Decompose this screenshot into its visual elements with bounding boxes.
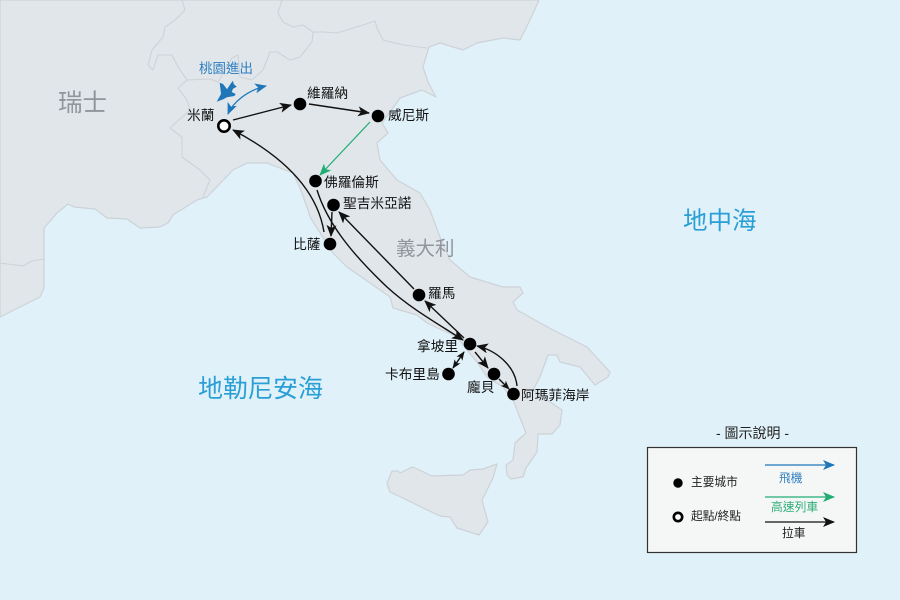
arrow: Verona to Venice: [309, 104, 369, 113]
legend icon: start and end point: [674, 513, 682, 521]
label: Pisa: 比薩: [293, 237, 321, 252]
marker: Milan: [218, 120, 230, 132]
legend icon: major city: [673, 478, 683, 488]
marker: Pompeii: [488, 368, 500, 380]
arrow: Pisa to Milan: [233, 130, 324, 232]
label: Florence: 佛羅倫斯: [324, 175, 379, 190]
legend title: - 圖示說明 -: [716, 425, 789, 441]
marker: Florence: [309, 175, 322, 187]
city markers: [218, 98, 520, 400]
arrow: flights in and out of Milan: [228, 86, 266, 114]
arrow: Naples and Capri: [453, 352, 464, 368]
legend text: driving: 拉車: [782, 526, 806, 540]
label: Capri: 卡布里島: [385, 367, 440, 382]
legend arrow: flight: [765, 464, 834, 466]
city labels: [187, 86, 589, 403]
arrow: Naples to Rome: [425, 301, 464, 338]
label: Venice: 威尼斯: [388, 108, 429, 123]
country label: Switzerland: 瑞士: [58, 89, 107, 117]
label: Pompeii: 龐貝: [467, 379, 494, 395]
arrow: Pompeii to Amalfi: [499, 379, 509, 389]
marker: Verona: [294, 98, 306, 110]
driving routes: [233, 104, 517, 389]
land: Sicily: [387, 464, 497, 535]
land: mainland Europe and Italy: [0, 0, 610, 479]
marker: Naples: [464, 338, 476, 350]
label: Milan: 米蘭: [187, 108, 214, 123]
arrow: Venice to Florence by high-speed train: [320, 122, 370, 175]
marker: Capri: [442, 368, 455, 380]
legend text: flight: 飛機: [779, 471, 803, 485]
label: Rome: 羅馬: [428, 286, 455, 301]
country label: Italy: 義大利: [396, 238, 455, 260]
arrow: Naples to Pompeii: [475, 352, 488, 368]
country borders: [0, 0, 427, 266]
arrow: Amalfi to Naples: [477, 346, 517, 386]
marker: Venice: [372, 110, 384, 122]
arrow: Rome to San Gimignano: [339, 212, 414, 289]
legend text: major city: 主要城市: [691, 475, 738, 489]
legend arrow: high-speed train: [765, 496, 834, 498]
legend arrow: driving: [765, 521, 834, 523]
landmass: [0, 0, 610, 535]
legend panel: [648, 448, 856, 552]
sea label: Tyrrhenian: 地勒尼安海: [198, 375, 323, 403]
arrow: Milan to Verona: [233, 105, 291, 120]
label: Amalfi Coast: 阿瑪菲海岸: [521, 388, 589, 403]
label: Naples: 拿坡里: [417, 338, 458, 354]
arrow: San Gimignano to Pisa: [331, 212, 332, 236]
marker: Pisa: [324, 238, 336, 250]
marker: San Gimignano: [327, 199, 340, 211]
marker: Rome: [413, 289, 425, 301]
legend text: high-speed train: 高速列車: [771, 500, 818, 514]
icon: airplane: [217, 81, 237, 102]
arrow: Florence to Naples: [317, 190, 463, 340]
label: San Gimignano: 聖吉米亞諾: [343, 196, 412, 211]
sea label: Mediterranean: 地中海: [683, 207, 756, 235]
marker: Amalfi: [507, 388, 520, 400]
legend text: start and end point: 起點/終點: [691, 509, 741, 523]
label: Verona: 維羅納: [307, 86, 348, 101]
legend box: [648, 448, 856, 552]
label: Taoyuan in and out: 桃園進出: [199, 61, 253, 76]
